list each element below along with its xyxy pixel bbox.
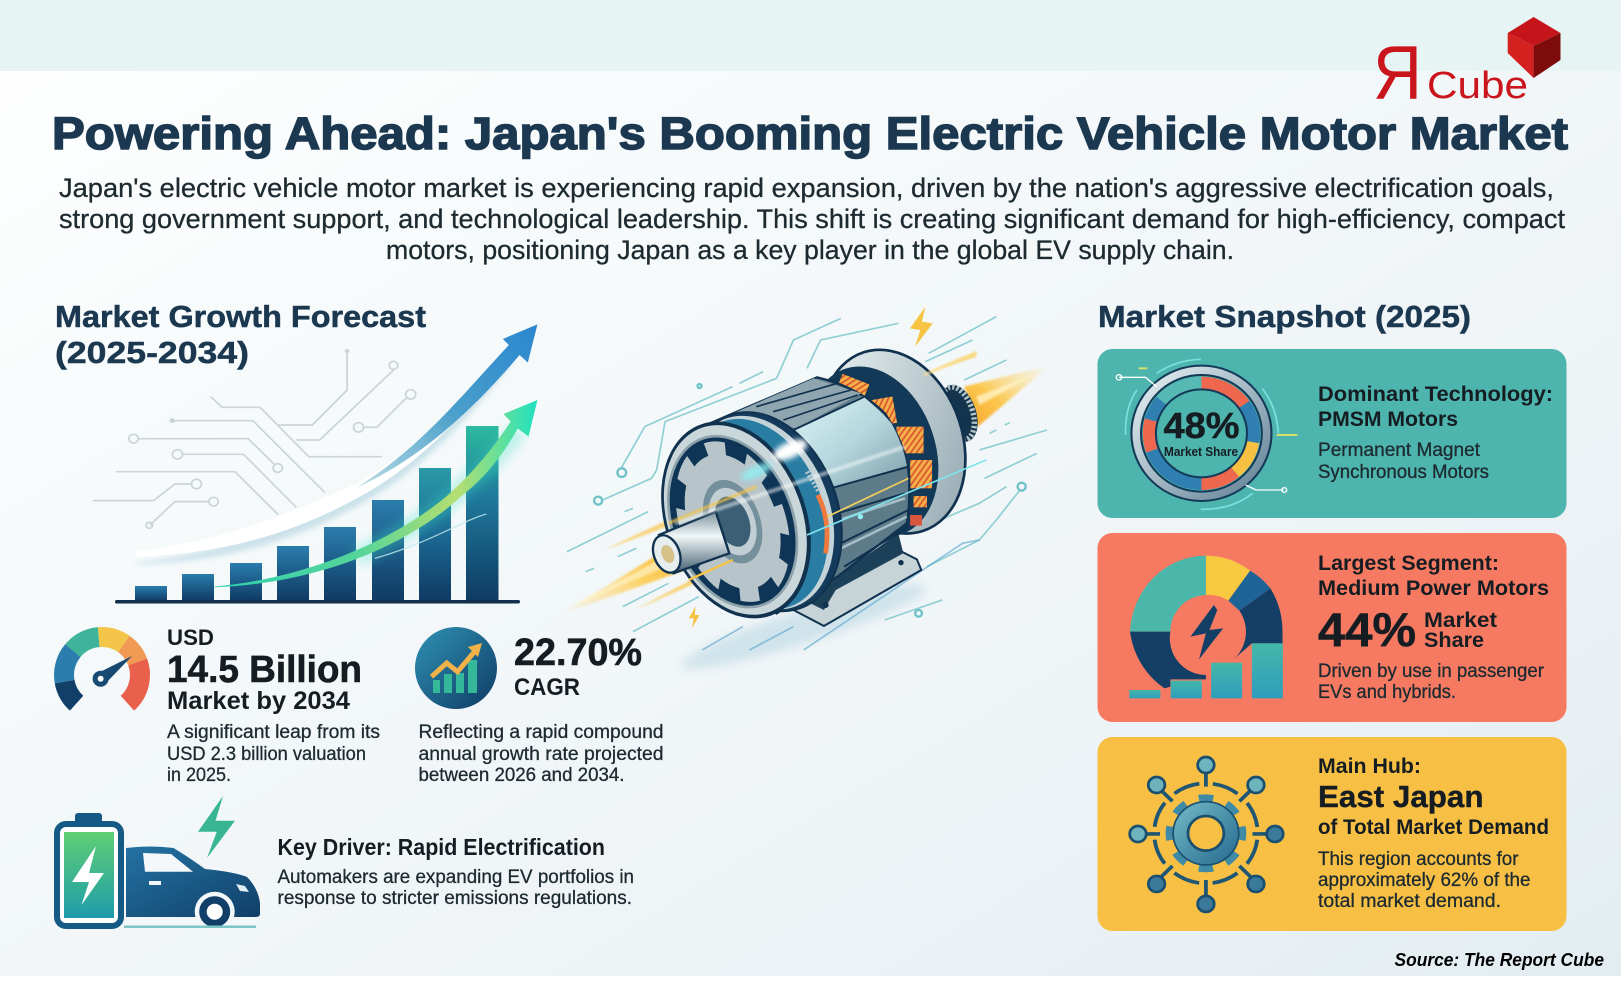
- winding section: [786, 350, 960, 554]
- card text: dominant technology: Synchronous Motors: [1318, 462, 1489, 483]
- card text: dominant technology: [1318, 382, 1553, 483]
- card text: largest segment: Share: [1424, 628, 1484, 652]
- green arrow: [214, 400, 537, 587]
- stat: USD 14.5 billion: A significant leap from its: [167, 722, 380, 743]
- heading: market growth forecast: Market Growth Forecast: [55, 299, 426, 334]
- card text: largest segment: EVs and hybrids.: [1318, 682, 1456, 703]
- heading: market growth forecast: [55, 299, 426, 370]
- front collar: [659, 391, 869, 633]
- motor bolts: [689, 307, 933, 628]
- text: key driver: response to stricter emissions regulations.: [278, 888, 632, 909]
- front gear: [662, 435, 803, 608]
- card text: main hub: of Total Market Demand: [1318, 815, 1549, 839]
- card text: main hub: [1318, 754, 1549, 912]
- icon: gauge: [64, 637, 140, 703]
- stat: CAGR: between 2026 and 2034.: [418, 765, 624, 786]
- card text: largest segment: Market: [1424, 608, 1497, 632]
- panel: dominant technology: [1098, 349, 1566, 518]
- icon: 48% market share ring: 48%: [1164, 405, 1240, 446]
- card text: largest segment: 44%: [1318, 603, 1416, 656]
- stat: USD 14.5 billion: USD: [167, 625, 214, 650]
- card text: main hub: total market demand.: [1318, 891, 1501, 912]
- icon: CAGR growth badge: [415, 627, 497, 709]
- text: key driver: Automakers are expanding EV portfolios in: [278, 867, 634, 888]
- stat: USD 14.5 billion: USD 2.3 billion valuation: [167, 744, 366, 765]
- stat: CAGR: [418, 632, 664, 786]
- copper coils: [838, 374, 932, 526]
- card text: largest segment: Largest Segment:: [1318, 551, 1499, 575]
- mounting base: [794, 533, 921, 626]
- stat: USD 14.5 billion: in 2025.: [167, 765, 231, 786]
- heading: market growth forecast: (2025-2034): [55, 335, 249, 370]
- front ring: [635, 401, 837, 639]
- blue arrow: [357, 324, 537, 487]
- card text: main hub: approximately 62% of the: [1318, 870, 1530, 891]
- energy streaks and flare: [668, 353, 986, 580]
- stat: CAGR: CAGR: [514, 674, 580, 701]
- card text: largest segment: Driven by use in passenger: [1318, 661, 1545, 682]
- intro paragraph: [59, 173, 1565, 265]
- rear ring: [798, 331, 989, 552]
- stat: CAGR: Reflecting a rapid compound: [418, 722, 664, 743]
- panel: main hub: [1098, 737, 1566, 931]
- icon: donut with bolt and bars: [1129, 556, 1283, 698]
- stat: USD 14.5 billion: [167, 625, 380, 786]
- card text: main hub: This region accounts for: [1318, 849, 1519, 870]
- logo: RCube: [1373, 17, 1560, 116]
- logo: RCube: Я: [1373, 31, 1422, 116]
- stat: CAGR: 22.70%: [514, 632, 642, 674]
- intro paragraph: Japan's electric vehicle motor market is experiencing rapid expansion, driven by the nation's aggressive electrification goals,: [59, 173, 1554, 203]
- motor glow and speed lines: [560, 317, 1050, 682]
- card text: dominant technology: Permanent Magnet: [1318, 440, 1481, 461]
- card text: largest segment: [1318, 551, 1549, 703]
- chart: growth bars with arrows: [93, 324, 537, 604]
- illustration: electric motor: [560, 307, 1050, 682]
- title: Powering Ahead: Japan's Booming Electric Vehicle Motor Market: [52, 108, 1568, 159]
- icon: 48% market share ring: [1116, 359, 1297, 509]
- source note: Source: The Report Cube: [1394, 949, 1604, 970]
- intro paragraph: strong government support, and technological leadership. This shift is creating significant demand for high-efficiency, compact: [59, 204, 1565, 234]
- intro paragraph: motors, positioning Japan as a key player in the global EV supply chain.: [386, 235, 1234, 265]
- card text: main hub: East Japan: [1318, 779, 1484, 814]
- motor body: [702, 377, 909, 613]
- stat: USD 14.5 billion: Market by 2034: [167, 687, 350, 715]
- card text: dominant technology: PMSM Motors: [1318, 407, 1458, 431]
- icon: 48% market share ring: Market Share: [1164, 445, 1238, 459]
- stat: USD 14.5 billion: 14.5 Billion: [167, 649, 362, 691]
- card text: dominant technology: Dominant Technology:: [1318, 382, 1553, 406]
- panel: largest segment: [1098, 533, 1566, 722]
- bars: [115, 426, 520, 604]
- icon: battery and electric car: [57, 796, 260, 932]
- text: key driver: [278, 834, 634, 909]
- card text: largest segment: Medium Power Motors: [1318, 576, 1549, 600]
- shaft: [648, 512, 729, 576]
- heading: market snapshot: Market Snapshot (2025): [1098, 299, 1471, 334]
- rear gear: [934, 380, 984, 446]
- logo: RCube: Cube: [1427, 65, 1528, 107]
- stat: CAGR: annual growth rate projected: [418, 744, 664, 765]
- card text: main hub: Main Hub:: [1318, 754, 1421, 778]
- text: key driver: Key Driver: Rapid Electrification: [278, 834, 605, 860]
- icon: gear network: [1130, 757, 1283, 912]
